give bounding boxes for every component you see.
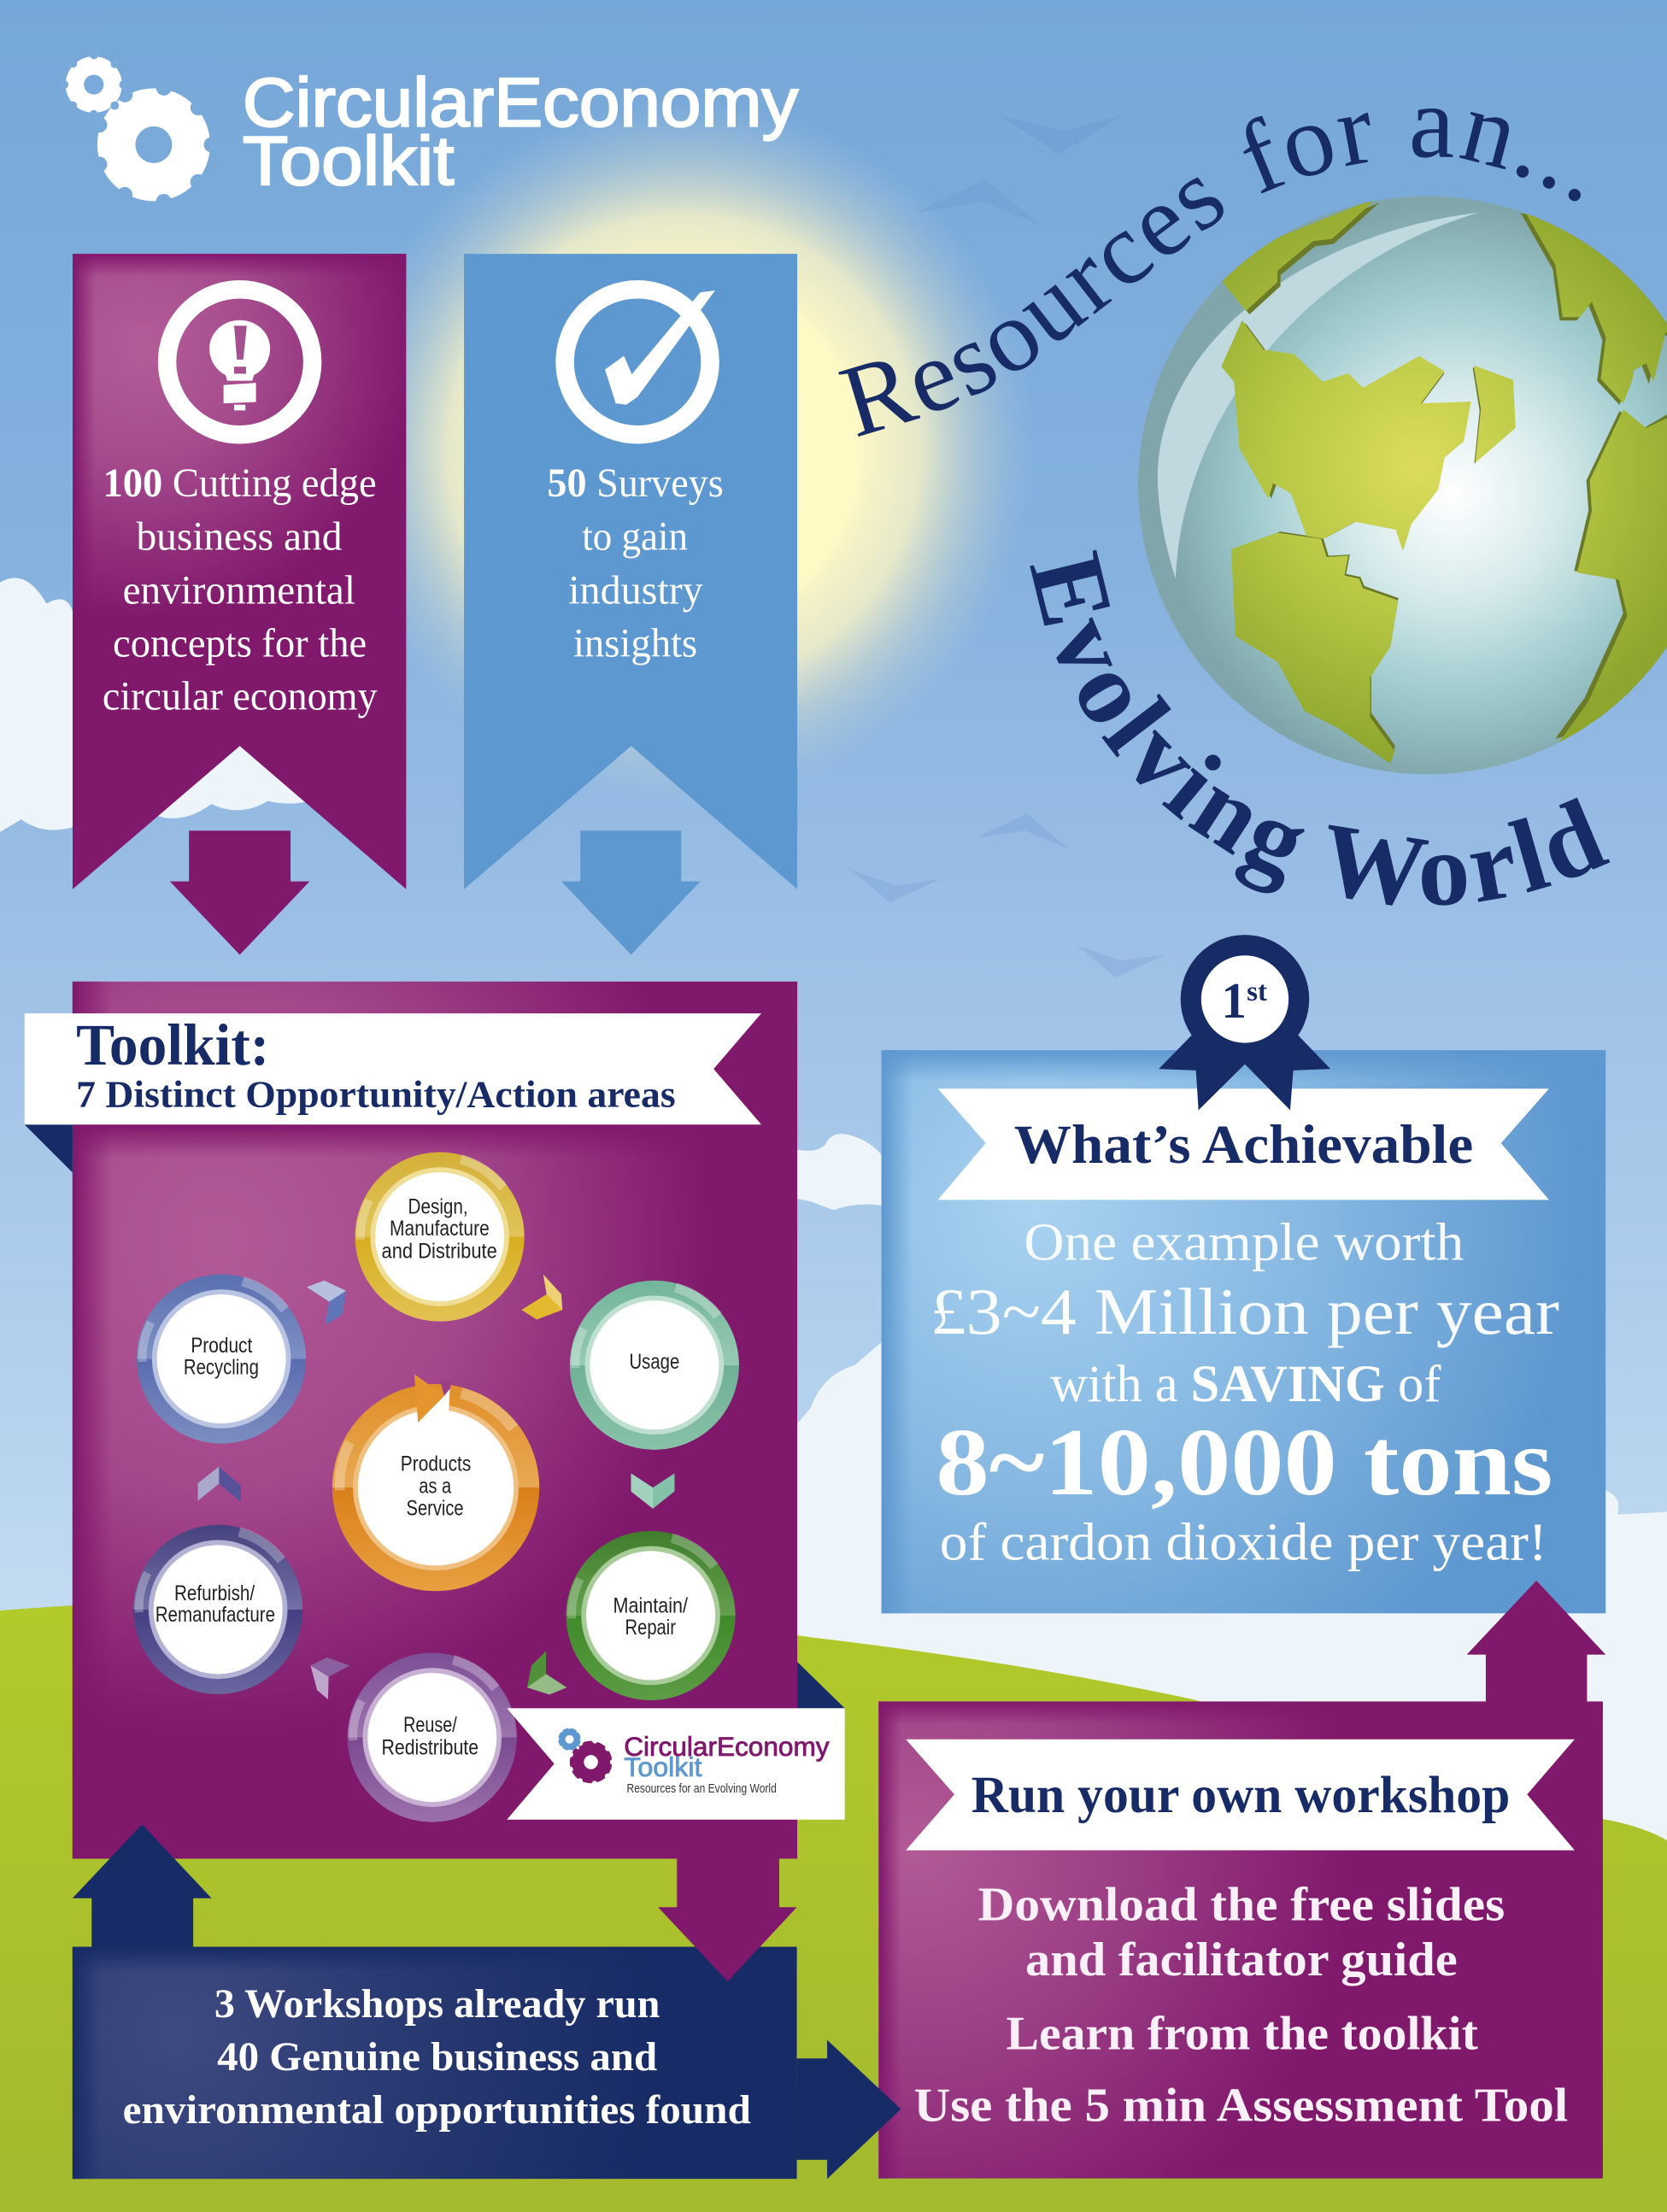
ring: Product Recycling: Product (191, 1335, 252, 1358)
panel: toolkit (25, 982, 845, 1859)
ribbon: Run your own workshop: Run your own workshop (971, 1767, 1510, 1824)
panel: 50 surveys banner (464, 254, 797, 889)
arrow: blue down (561, 830, 701, 954)
ring: Usage: Usage (629, 1351, 679, 1374)
ribbon: toolkit heading (25, 1012, 761, 1172)
text block: of cardon dioxide per year! (940, 1512, 1547, 1572)
arrow: indigo chevron (198, 1467, 241, 1502)
ribbon: What's Achievable: What’s Achievable (1014, 1114, 1473, 1175)
text block: Learn from the toolkit (1007, 2007, 1478, 2060)
ribbon: small logo: CircularEconomy (624, 1732, 830, 1762)
ring: Maintain/Repair: Maintain/ (613, 1595, 688, 1618)
ring: Product Recycling (137, 1274, 306, 1444)
text block: business and (136, 514, 342, 560)
ring: Maintain/Repair (566, 1531, 736, 1700)
text block: £3~4 Million per year (930, 1275, 1559, 1348)
ring: Product Recycling: Recycling (184, 1357, 259, 1380)
panel: workshops (73, 1824, 797, 2179)
icon: small gears (558, 1728, 613, 1784)
text block: 100 Cutting edge (103, 461, 377, 506)
ribbon: small logo (507, 1662, 845, 1820)
continents (1218, 197, 1667, 764)
text block: to gain (582, 514, 688, 560)
ring: Products as a Service: Service (407, 1498, 464, 1521)
ring: Reuse/Redistribute (348, 1653, 517, 1822)
text block: Download the free slides (978, 1878, 1505, 1931)
ring: Design, Manufacture and Distribute: Design, (408, 1195, 468, 1218)
text block: circular economy (103, 673, 378, 719)
panel: what's achievable (882, 935, 1605, 1613)
heading: Evolving World: Evolving World (1030, 550, 1610, 906)
text block (914, 1878, 1568, 2133)
ring: Products as a Service: Products (401, 1453, 471, 1476)
hills (0, 1599, 1667, 2212)
text block (930, 1212, 1559, 1572)
ribbon: small logo: Toolkit (624, 1752, 702, 1782)
ring: Maintain/Repair: Repair (625, 1616, 676, 1640)
panel: run your own workshop (878, 1581, 1605, 2179)
text block: 8~10,000 tons (936, 1410, 1553, 1516)
ribbon: small logo: Resources for an Evolving World (627, 1782, 777, 1796)
text block: and facilitator guide (1025, 1933, 1458, 1986)
ring: Refurbish/Remanufacture: Remanufacture (156, 1604, 275, 1627)
ribbon: toolkit heading: Toolkit: (76, 1012, 269, 1077)
logo text: CircularEconomy (243, 65, 799, 142)
ring: Reuse/Redistribute: Redistribute (381, 1736, 478, 1759)
globe (1138, 196, 1667, 774)
ring: Design, Manufacture and Distribute: and Distribute (381, 1240, 497, 1263)
text block (547, 461, 724, 666)
birds (849, 114, 1165, 977)
text block: 3 Workshops already run (214, 1981, 660, 2027)
text block: Use the 5 min Assessment Tool (914, 2080, 1568, 2133)
text block (103, 461, 378, 719)
text block: environmental opportunities found (123, 2087, 751, 2133)
sun (332, 99, 1036, 804)
heading: Resources for an...: Resources for an... (838, 109, 1581, 437)
ring: Usage (570, 1281, 739, 1450)
ring: Products as a Service (332, 1374, 539, 1591)
arrow: purple chevron (310, 1658, 349, 1699)
icon: gears (64, 55, 212, 202)
icon: check mark (565, 290, 715, 435)
text block: industry (568, 567, 703, 613)
icon: light bulb (167, 290, 313, 435)
text block: with a SAVING of (1050, 1356, 1441, 1413)
logo: Circular Economy Toolkit (64, 55, 799, 202)
ring: Refurbish/Remanufacture: Refurbish/ (174, 1582, 255, 1605)
text block: 50 Surveys (547, 461, 724, 506)
icon: 1st rosette: st (1247, 977, 1267, 1007)
ring: Design, Manufacture and Distribute (355, 1153, 525, 1322)
ring: Reuse/Redistribute: Reuse/ (403, 1714, 457, 1737)
arrow: navy to workshop panel (797, 2040, 901, 2179)
ribbon: What's Achievable (938, 1088, 1549, 1200)
panel: 100 concepts banner (73, 254, 406, 889)
logo text: Toolkit (243, 123, 454, 200)
arrow: green chevron (527, 1651, 566, 1694)
text block: concepts for the (113, 620, 367, 666)
arrow: yellow chevron (521, 1275, 562, 1319)
arrow: teal chevron (631, 1473, 674, 1509)
icon: 1st rosette (1159, 935, 1330, 1110)
clouds (0, 578, 1667, 1851)
text block: environmental (123, 567, 355, 613)
ribbon: toolkit heading: 7 Distinct Opportunity/Action areas (76, 1073, 676, 1116)
arrow: blue chevron (307, 1281, 346, 1325)
ribbon: Run your own workshop (906, 1740, 1575, 1851)
ring: Design, Manufacture and Distribute: Manufacture (390, 1217, 490, 1241)
text block: insights (573, 620, 697, 666)
text block (123, 1981, 751, 2133)
text block: 40 Genuine business and (217, 2034, 658, 2080)
icon: 1st rosette: 1 (1221, 972, 1247, 1029)
ring: Refurbish/Remanufacture (133, 1525, 302, 1694)
text block: One example worth (1024, 1212, 1464, 1272)
logo text (243, 65, 799, 200)
arrow: purple down to workshops (658, 1859, 797, 1981)
arrow: purple down (170, 830, 309, 954)
ring: Products as a Service: as a (419, 1475, 451, 1498)
